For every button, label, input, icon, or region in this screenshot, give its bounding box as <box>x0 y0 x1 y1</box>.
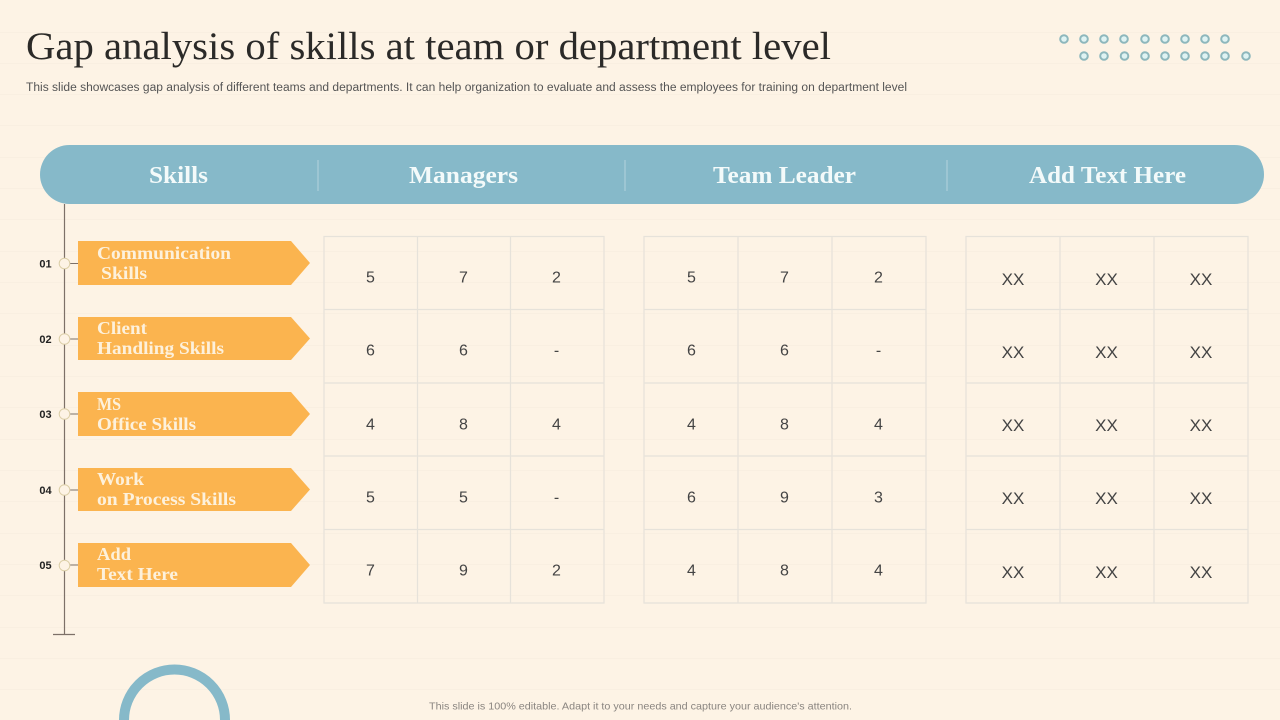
table: add text here: XX <box>1095 270 1118 289</box>
skill row 04 <box>39 468 310 511</box>
table: team leader: 6 <box>780 342 789 360</box>
table: team leader: 4 <box>874 416 883 434</box>
table: managers: 4 <box>366 416 375 434</box>
table: team leader: 3 <box>874 490 883 506</box>
skill row 03: Office Skills <box>97 414 196 434</box>
table: managers: 7 <box>459 270 468 286</box>
table: add text here: XX <box>1002 489 1024 508</box>
skill row 03: 03 <box>39 409 52 421</box>
subtitle description: This slide showcases gap analysis of different teams and departments. It can help organization to evaluate and assess the employees for training on department level <box>26 82 907 94</box>
table: team leader: 4 <box>687 416 696 434</box>
table: team leader: 8 <box>780 562 789 580</box>
table: team leader: 4 <box>874 562 883 580</box>
footer note: This slide is 100% editable. Adapt it to your needs and capture your audience's attention. <box>429 700 852 712</box>
table: managers <box>324 236 604 603</box>
table: add text here: XX <box>1095 343 1118 362</box>
table: add text here <box>966 236 1248 603</box>
table: managers: - <box>554 490 559 506</box>
skill row 02: Handling Skills <box>97 338 224 358</box>
table: add text here: XX <box>1190 489 1212 508</box>
skill row 01: Skills <box>101 263 147 283</box>
table: add text here: XX <box>1095 563 1118 582</box>
table: managers: 6 <box>459 342 468 360</box>
table: add text here: XX <box>1002 416 1024 435</box>
decorative dot pattern <box>1060 35 1250 60</box>
table: add text here: XX <box>1095 416 1118 435</box>
table: add text here: XX <box>1190 343 1212 362</box>
header: Skills: Skills <box>149 163 208 189</box>
table: team leader: 6 <box>687 342 696 360</box>
table: team leader: 9 <box>780 490 789 506</box>
table: managers: 5 <box>459 490 468 506</box>
table: managers: 7 <box>366 562 375 580</box>
table: team leader: 8 <box>780 416 789 434</box>
table: add text here: XX <box>1002 343 1024 362</box>
table: team leader: 5 <box>687 270 696 286</box>
table: team leader: 6 <box>687 490 696 506</box>
table: team leader: 2 <box>874 270 883 286</box>
table: managers: 6 <box>366 342 375 360</box>
skill row 04: 04 <box>39 485 52 497</box>
skill row 02: Client <box>97 318 147 338</box>
skill row 01: Communication <box>97 243 231 263</box>
table: team leader: 4 <box>687 562 696 580</box>
skill row 02 <box>39 317 310 360</box>
table: managers: - <box>554 342 559 360</box>
table: managers: 2 <box>552 270 561 286</box>
header: Managers: Managers <box>409 163 518 189</box>
skill row 04: Work <box>97 469 144 489</box>
skill row 05: 05 <box>39 560 52 572</box>
table: managers: 8 <box>459 416 468 434</box>
skill row 03: MS <box>97 394 121 414</box>
header band <box>40 145 1264 204</box>
table: add text here: XX <box>1002 270 1024 289</box>
skill row 05 <box>39 543 310 587</box>
title: Gap analysis of skills at team or department level <box>26 25 831 68</box>
table: managers: 5 <box>366 490 375 506</box>
skill row 04: on Process Skills <box>97 489 236 509</box>
table: add text here: XX <box>1002 563 1024 582</box>
skill row 01: 01 <box>39 258 52 270</box>
header: Team Leader: Team Leader <box>713 163 856 189</box>
table: add text here: XX <box>1190 270 1212 289</box>
table: add text here: XX <box>1190 416 1212 435</box>
table: managers: 9 <box>459 562 468 580</box>
table: add text here: XX <box>1190 563 1212 582</box>
table: add text here: XX <box>1095 489 1118 508</box>
skill row 03 <box>39 392 310 436</box>
skill row 05: Add <box>97 544 131 564</box>
skill row 02: 02 <box>39 334 52 346</box>
skill row 05: Text Here <box>97 564 178 584</box>
table: team leader: - <box>876 342 881 360</box>
skill row 01 <box>39 241 310 285</box>
table: team leader <box>644 236 926 603</box>
table: managers: 5 <box>366 270 375 286</box>
table: managers: 4 <box>552 416 561 434</box>
header: Add Text Here: Add Text Here <box>1029 163 1186 189</box>
table: managers: 2 <box>552 562 561 580</box>
table: team leader: 7 <box>780 270 789 286</box>
decorative ring <box>124 670 225 720</box>
timeline axis <box>53 204 75 634</box>
